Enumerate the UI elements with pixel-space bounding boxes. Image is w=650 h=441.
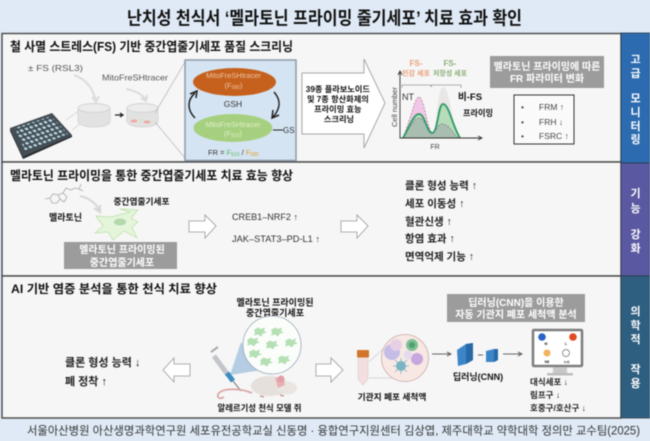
- text: cell changes: [530, 377, 586, 413]
- reduced tracer ellipse: MitoFreSHtracer: [205, 120, 261, 129]
- sidebar: advanced monitoring: 터: [630, 120, 641, 133]
- sidebar: mechanism of action: 학: [630, 318, 641, 332]
- sidebar: function enhancement: 강: [630, 228, 641, 241]
- callout: CNN analysis: [447, 294, 585, 322]
- reduced tracer ellipse: (F: [224, 129, 231, 138]
- arrow: to pathways: [189, 215, 216, 238]
- callout: primed MSC: [64, 242, 177, 269]
- gray overlay distribution: [403, 118, 458, 138]
- heading: AI analysis: AI 기반 염증 분석을 통한 천식 치료 향상: [11, 281, 217, 296]
- text: pathways: [232, 212, 320, 244]
- label: mouse model: 알레르기성 천식 모델 쥐: [217, 403, 302, 413]
- chart: FR histogram: [390, 59, 493, 151]
- label: BALF: 기관지 폐포 세척액: [358, 391, 426, 402]
- arrow: large screening arrow: [302, 59, 385, 148]
- heading: melatonin priming: 멜라토닌 프라이밍을 통한 중간엽줄기세포 치료 효능 향상: [10, 168, 293, 183]
- pink distribution: [403, 97, 432, 138]
- callout: CNN analysis: 자동 기관지 폐포 세척액 분석: [455, 308, 577, 321]
- footer credit: 서울아산병원 아산생명과학연구원 세포유전공학교실 신동명 · 융합연구지원센터 김상엽, 제주대학교 약학대학 정의만 교수팀(2025): [27, 424, 640, 438]
- box: FR parameters: •: [521, 131, 524, 141]
- sidebar: function enhancement: 기: [630, 186, 641, 200]
- sidebar: advanced monitoring: 니: [630, 106, 641, 119]
- arrow: cycle left: [189, 91, 197, 118]
- icon: BALF cells circle: [382, 334, 428, 382]
- sidebar: advanced monitoring: 고: [630, 54, 641, 66]
- label: FR formula: 510: [231, 152, 240, 158]
- icon: CNN cubes: [457, 343, 498, 366]
- label: primed MSC: 멜라토닌 프라이밍된: [236, 296, 314, 308]
- bracket: [402, 85, 461, 88]
- arrow: to effects: [341, 215, 368, 238]
- text: effects list: 세포 이동성 ↑: [405, 197, 464, 210]
- panel: melatonin priming: [2, 162, 621, 276]
- icon: monitor: L: [565, 342, 568, 346]
- sidebar: advanced monitoring: 모: [630, 92, 641, 105]
- reduced tracer ellipse: [194, 114, 272, 142]
- text: effects list: 항염 효과 ↑: [405, 232, 455, 245]
- text: cell changes: 림프구 ↓: [530, 390, 560, 400]
- icon: well plate: [10, 113, 72, 159]
- label: MSC: 중간엽줄기세포: [114, 196, 169, 206]
- x label: FR: [430, 144, 440, 151]
- icon: stem cell: [95, 209, 138, 240]
- icon: monitor: e.d.: [564, 360, 570, 364]
- text: outcomes: [65, 355, 140, 388]
- box: FR parameters: [514, 95, 574, 144]
- box: FR parameters: FSRC ↑: [539, 131, 569, 141]
- decorative zoom lines plate to dish: [66, 110, 80, 130]
- callout: FR parameter heading: 멜라토닌 프라이밍에 따른: [494, 60, 600, 73]
- panel: AI analysis: [2, 276, 621, 418]
- arrow: large screening arrow: 및 7종 항산화제의: [307, 94, 369, 104]
- arrow: large screening arrow: 스크리닝: [324, 114, 354, 124]
- label: FS resistant: [433, 59, 468, 78]
- arrow: tracer to dish: [126, 89, 147, 101]
- label: FS sensitive: [402, 59, 431, 78]
- decorative zoom lines dish to box: [155, 62, 185, 158]
- green filled distribution: [403, 104, 460, 138]
- title: 난치성 천식서 ‘멜라토닌 프라이밍 줄기세포’ 치료 효과 확인: [127, 8, 522, 28]
- reduced tracer ellipse: ): [239, 129, 242, 138]
- arrow: dish to dish: [115, 113, 123, 117]
- icon: syringe: [211, 347, 241, 391]
- sidebar: mechanism of action: [621, 276, 650, 418]
- label: NT: NT: [402, 92, 414, 102]
- label: GSH: GSH: [224, 99, 242, 109]
- label: FR formula: /: [239, 148, 246, 157]
- arrow: RSL3 to dish: [74, 75, 99, 102]
- text: cell changes: 호중구/호산구 ↓: [530, 403, 586, 413]
- callout: primed MSC: 중간엽줄기세포: [90, 256, 154, 269]
- text: pathways: JAK–STAT3–PD-L1 ↑: [232, 234, 320, 244]
- box: FR parameters: FRM ↑: [539, 102, 564, 112]
- label: FR formula: FR = F: [208, 148, 231, 157]
- icon: dish 2: [127, 104, 158, 127]
- sidebar: mechanism of action: 용: [630, 377, 641, 390]
- arrow: to BALF: [316, 358, 343, 382]
- oxidised tracer ellipse: MitoFreSHtracer: [206, 71, 262, 80]
- sidebar: advanced monitoring: [621, 33, 650, 163]
- text: effects list: [405, 179, 477, 263]
- y label: Cell number: [390, 87, 399, 127]
- icon: monitor: NE: [545, 360, 550, 364]
- label: FR formula: 580: [250, 152, 259, 158]
- label: FR formula: F: [246, 148, 259, 158]
- label: FS sensitive: FS-: [410, 59, 423, 68]
- panel: GSH cycle: [185, 60, 296, 160]
- icon: injection cone: [230, 342, 262, 375]
- icon: cell magnifier circle: [243, 316, 301, 374]
- label: melatonin: 멜라토닌: [49, 212, 82, 222]
- label: FS resistant: 저항성 세포: [433, 68, 468, 78]
- label: CNN: 딥러닝(CNN): [453, 371, 503, 382]
- icon: monitor: M: [545, 342, 548, 346]
- decorative zoom lines: [369, 341, 394, 378]
- panel: FS screening: [2, 34, 621, 162]
- sidebar: mechanism of action: 의: [630, 305, 641, 318]
- arrow: BALF to CNN: [432, 352, 451, 356]
- callout: FR parameter heading: [490, 56, 604, 88]
- icon: monitor: [533, 330, 582, 376]
- text: effects list: 면역억제 기능 ↑: [405, 250, 474, 263]
- arrow: to outcomes: [163, 358, 190, 382]
- callout: primed MSC: 멜라토닌 프라이밍된: [79, 243, 165, 256]
- sidebar: advanced monitoring: 링: [630, 133, 641, 146]
- label: primed MSC: 중간엽줄기세포: [246, 307, 304, 318]
- oxidised tracer ellipse: ): [240, 81, 243, 90]
- arrow: CNN to monitor: [503, 352, 522, 356]
- axes: [398, 71, 482, 140]
- arrow: large screening arrow: 프라이밍 효능: [314, 104, 362, 114]
- box: FR parameters: •: [521, 102, 524, 112]
- label: non-FS: 비-FS: [458, 91, 482, 103]
- label: FS resistant: FS-: [444, 59, 457, 68]
- gray distribution: [403, 87, 459, 138]
- oxidised tracer ellipse: 580: [232, 85, 240, 91]
- arrow: cycle right: [272, 92, 279, 118]
- label: FS RSL3: ± FS (RSL3): [28, 63, 83, 73]
- sidebar: function enhancement: 능: [630, 202, 641, 215]
- icon: BALF tube: [357, 350, 369, 385]
- text: outcomes: 클론 형성 능력 ↓: [65, 355, 140, 369]
- arrow: large screening arrow: 39종 플라보노이드: [306, 84, 370, 94]
- oxidised tracer ellipse: (F: [225, 81, 232, 90]
- text: effects list: 혈관신생 ↑: [405, 215, 452, 228]
- text: cell changes: 대식세포 ↓: [530, 377, 568, 387]
- sidebar: function enhancement: [621, 163, 650, 276]
- icon: melatonin molecule: [45, 184, 83, 203]
- label: priming: 프라이밍: [463, 108, 493, 118]
- sidebar: advanced monitoring: 급: [630, 67, 641, 80]
- oxidised tracer ellipse: [193, 68, 276, 96]
- box: FR parameters: FRH ↓: [539, 117, 563, 127]
- text: pathways: CREB1–NRF2 ↑: [232, 212, 298, 222]
- text: outcomes: 폐 정착 ↑: [65, 374, 107, 388]
- green curve: [403, 104, 460, 138]
- label: GS: GS: [283, 126, 295, 135]
- sidebar: function enhancement: 화: [630, 241, 641, 255]
- icon: mouse: [218, 376, 297, 398]
- reduced tracer ellipse: 510: [231, 133, 240, 139]
- label: FS sensitive: 민감 세포: [402, 68, 431, 78]
- sidebar: mechanism of action: 작: [630, 363, 641, 376]
- sidebar: mechanism of action: 적: [630, 333, 641, 346]
- icon: dish 1: [78, 104, 110, 127]
- heading: FS screening: 철 사멸 스트레스(FS) 기반 중간엽줄기세포 품질 스크리닝: [10, 39, 293, 54]
- text: effects list: 클론 형성 능력 ↑: [405, 179, 477, 192]
- callout: FR parameter heading: FR 파라미터 변화: [510, 72, 584, 85]
- callout: CNN analysis: 딥러닝(CNN)을 이용한: [468, 296, 564, 309]
- label: MitoFreSHtracer: MitoFreSHtracer: [102, 72, 168, 82]
- arrow: melatonin to cell: [80, 196, 100, 212]
- box: FR parameters: •: [521, 117, 524, 127]
